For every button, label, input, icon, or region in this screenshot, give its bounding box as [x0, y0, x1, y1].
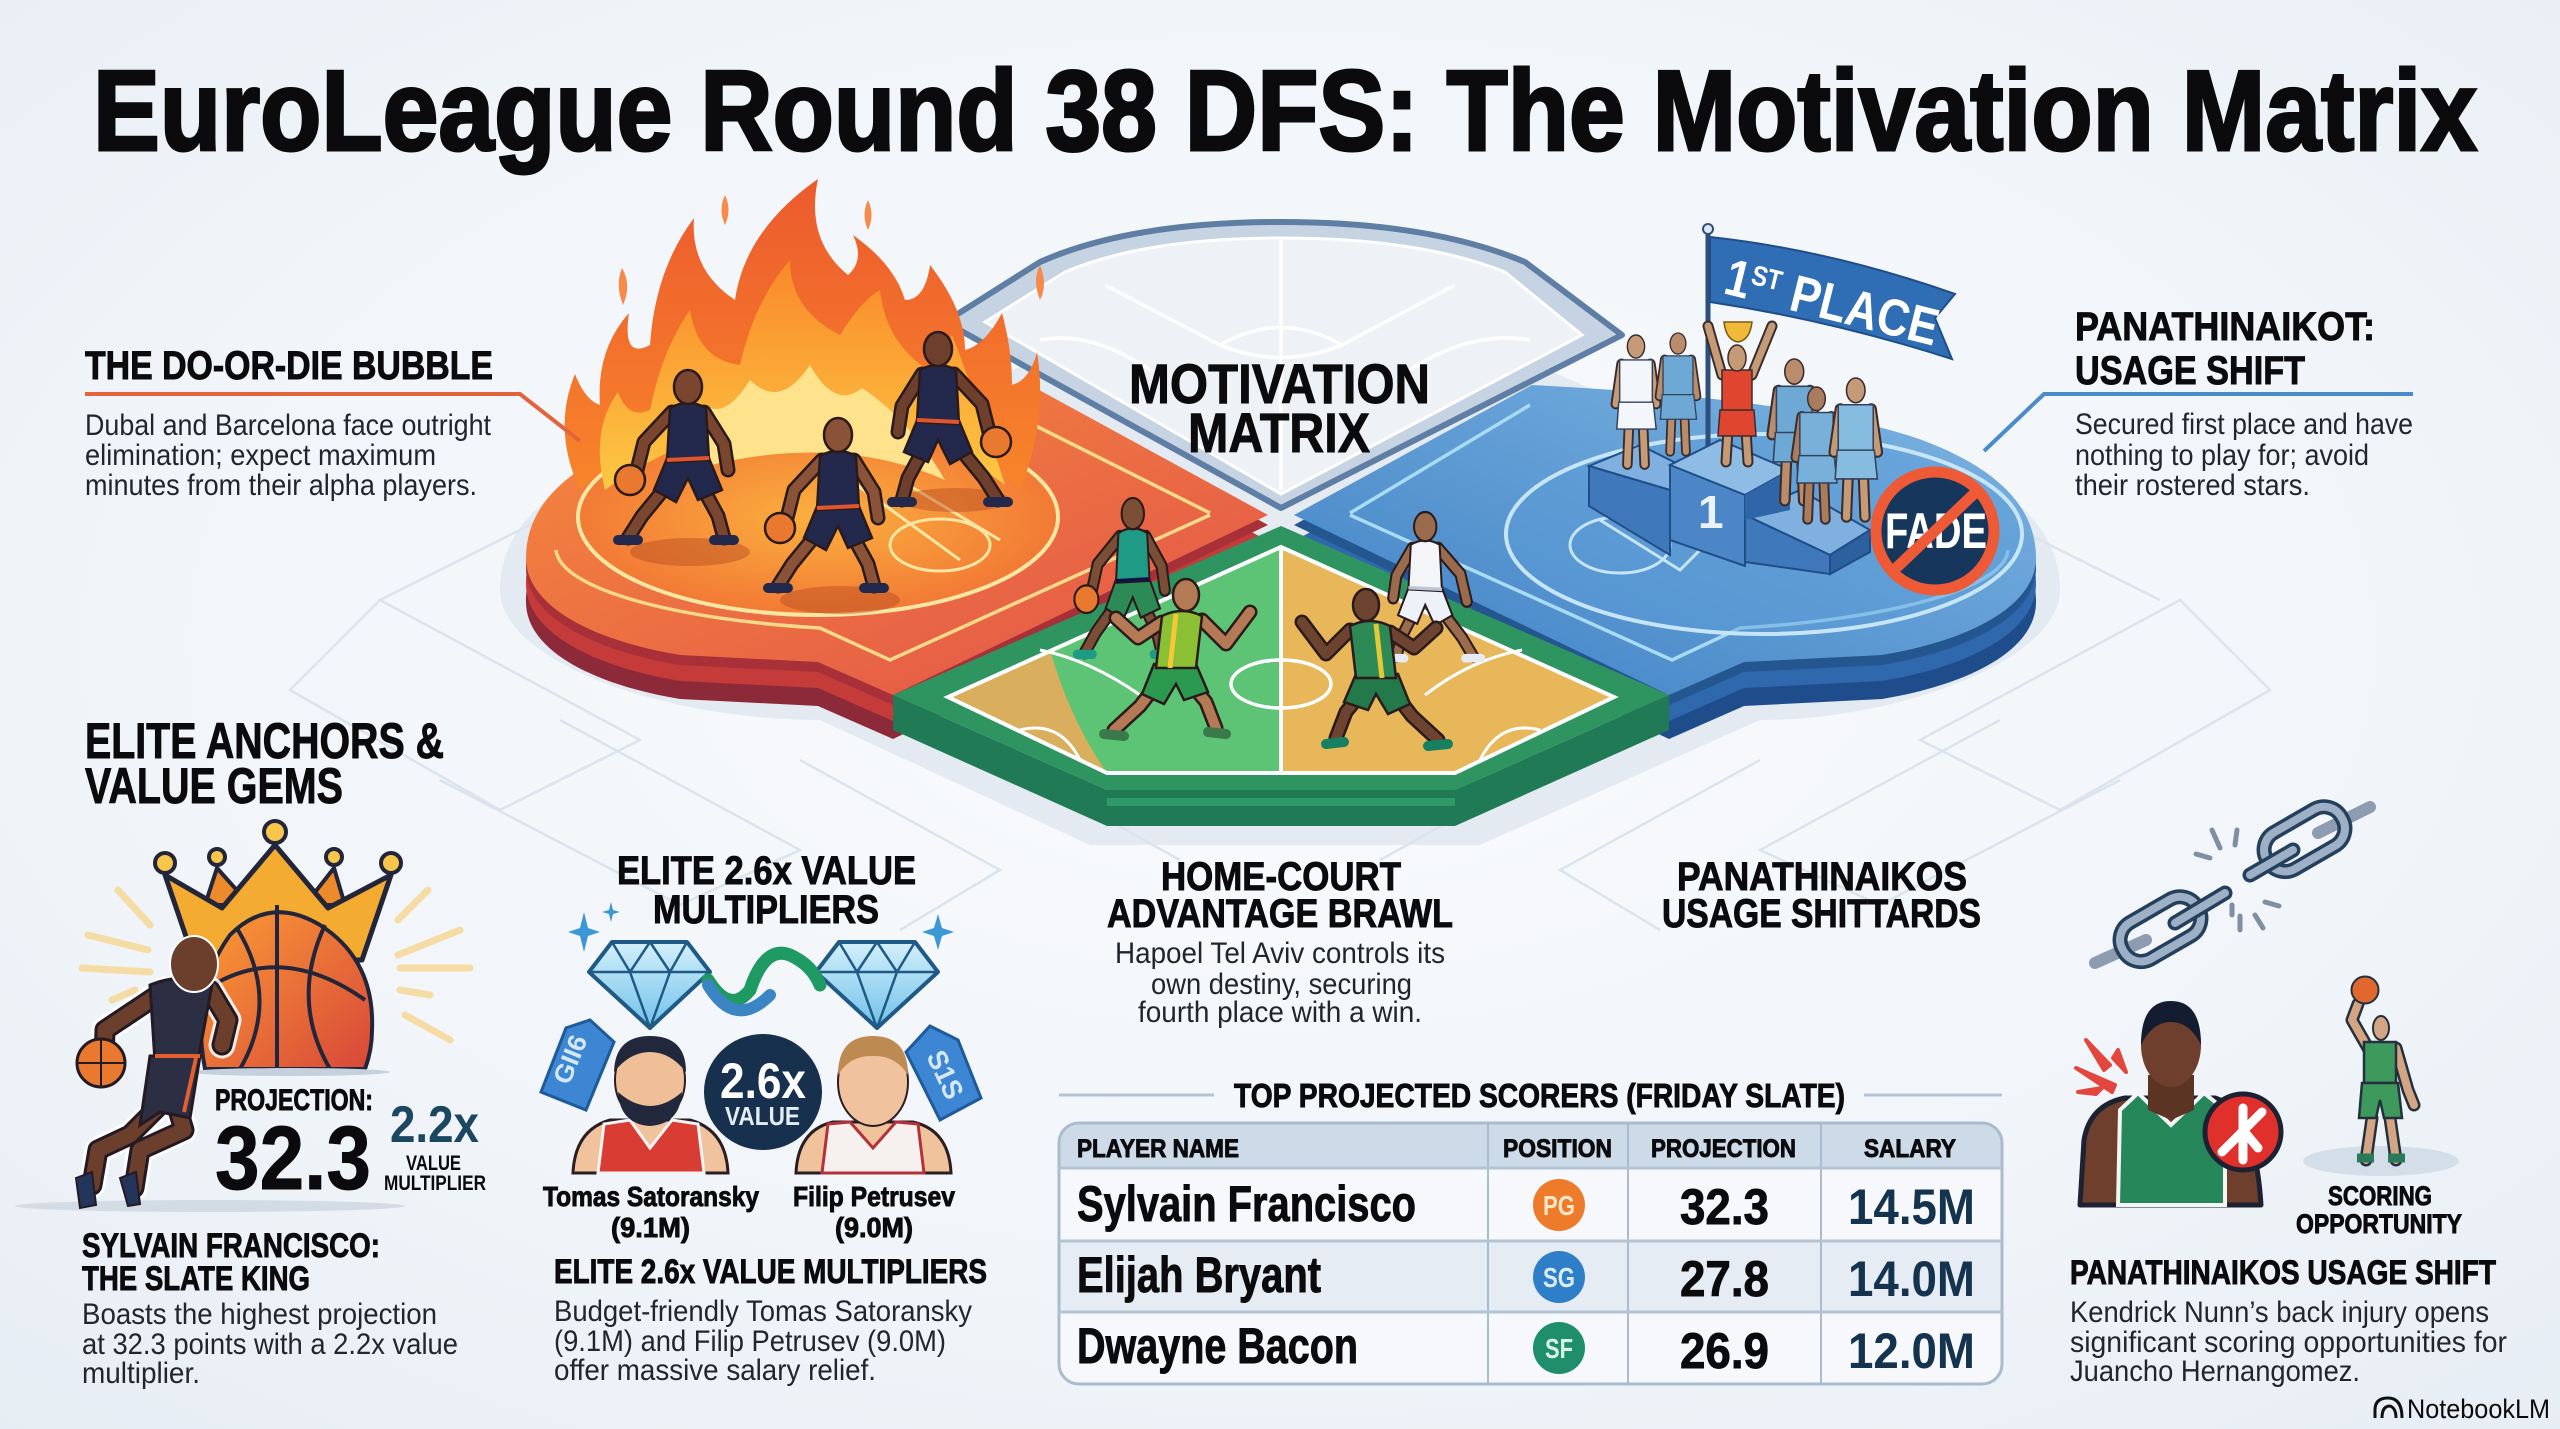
text block: value multipliers: ELITE 2.6x VALUE MULTIPLIERS — [554, 1253, 987, 1291]
player captions — [543, 1181, 955, 1243]
row: Elijah Bryant: SG — [1543, 1262, 1575, 1293]
table header — [1077, 1135, 1956, 1163]
row: Sylvain Francisco — [1077, 1176, 1975, 1235]
price tags: GII6 — [547, 1031, 593, 1088]
row: Dwayne Bacon: 12.0M — [1848, 1323, 1975, 1379]
players: green zone — [1074, 498, 1484, 746]
callout: usage shift fade: USAGE SHIFT — [2075, 349, 2305, 393]
text block: home-court advantage — [1107, 855, 1453, 1029]
section heading: elite anchors: VALUE GEMS — [85, 758, 343, 814]
matrix label: MOTIVATION — [1129, 352, 1430, 415]
price tags: S1S — [921, 1045, 970, 1104]
pain bolts — [2076, 1040, 2126, 1094]
flames over red quadrant — [565, 179, 1044, 490]
stat: value multiplier — [384, 1096, 486, 1195]
illustration: value gems and players — [541, 902, 981, 1173]
text block: panathinaikos usage shift: significant scoring opportunities for — [2070, 1326, 2507, 1359]
notebooklm mark: NotebookLM — [2407, 1394, 2550, 1424]
stat: value multiplier: 2.2x — [390, 1096, 479, 1154]
icon: shooter scoring opportunity: SCORING — [2328, 1181, 2432, 1211]
text block: home-court advantage: HOME-COURT — [1161, 855, 1401, 899]
podium with champions — [1589, 224, 1955, 574]
swap swirl — [708, 953, 820, 1000]
text block: value multipliers: (9.1M) and Filip Petrusev (9.0M) — [554, 1325, 946, 1358]
sparkles — [568, 902, 954, 952]
text block: slate king: Boasts the highest projection — [82, 1298, 437, 1331]
row: Sylvain Francisco: PG — [1543, 1190, 1575, 1221]
callout: usage shift fade — [1984, 305, 2413, 502]
quadrant: home court green — [893, 526, 1669, 826]
basketball — [201, 912, 372, 1069]
flag: 1st place: 1 — [1719, 248, 1761, 312]
stat: projection: PROJECTION: — [215, 1084, 373, 1117]
heading: elite multipliers: ELITE 2.6x VALUE — [617, 849, 916, 893]
table: top projected scorers — [1059, 1077, 2002, 1384]
row: Elijah Bryant — [1077, 1247, 1975, 1307]
badge: 2.6x value: VALUE — [725, 1101, 800, 1131]
price tags — [541, 1020, 981, 1120]
text block: slate king: THE SLATE KING — [82, 1260, 310, 1298]
sun rays — [82, 890, 470, 1040]
row: Dwayne Bacon — [1077, 1318, 1975, 1379]
callout: usage shift fade: nothing to play for; avoid — [2075, 439, 2369, 472]
text block: value multipliers: Budget-friendly Tomas Satoransky — [554, 1295, 972, 1328]
heading: usage shittards — [1662, 855, 1981, 936]
row: Elijah Bryant: 14.0M — [1848, 1251, 1975, 1307]
table header: POSITION — [1503, 1135, 1612, 1163]
row: Elijah Bryant: Elijah Bryant — [1077, 1247, 1321, 1303]
icon: shooter scoring opportunity — [2296, 976, 2462, 1239]
callout: do-or-die bubble: THE DO-OR-DIE BUBBLE — [85, 344, 493, 388]
callout: do-or-die bubble: minutes from their alpha players. — [85, 469, 477, 502]
stat: projection: 32.3 — [215, 1109, 371, 1209]
player captions: Tomas Satoransky — [543, 1181, 759, 1212]
text block: home-court advantage: Hapoel Tel Aviv controls its — [1115, 937, 1445, 970]
callout: do-or-die bubble: Dubal and Barcelona face outright — [85, 409, 492, 442]
text block: home-court advantage: ADVANTAGE BRAWL — [1107, 892, 1453, 936]
table header: SALARY — [1864, 1135, 1956, 1163]
table header: PLAYER NAME — [1077, 1135, 1239, 1163]
callout: usage shift fade: Secured first place and have — [2075, 408, 2413, 441]
matrix label: MATRIX — [1188, 401, 1370, 464]
icon: shooter scoring opportunity: OPPORTUNITY — [2296, 1209, 2462, 1239]
row: Sylvain Francisco: 32.3 — [1680, 1179, 1769, 1235]
heading: usage shittards: USAGE SHITTARDS — [1662, 892, 1981, 936]
fade badge: FADE — [1885, 503, 1987, 559]
row: Sylvain Francisco: Sylvain Francisco — [1077, 1176, 1416, 1232]
heading: elite multipliers — [617, 849, 916, 932]
row: Sylvain Francisco: 14.5M — [1848, 1179, 1975, 1235]
row: Dwayne Bacon: Dwayne Bacon — [1077, 1318, 1358, 1374]
quadrant: usage shift blue — [1294, 385, 2036, 739]
callout: do-or-die bubble: elimination; expect maximum — [85, 439, 436, 472]
text block: value multipliers — [554, 1253, 987, 1387]
callout: usage shift fade: PANATHINAIKOT: — [2075, 305, 2375, 349]
text block: home-court advantage: own destiny, securing — [1151, 968, 1412, 1001]
quadrant: central grey court — [945, 222, 1622, 508]
matrix label — [1129, 352, 1430, 464]
row: Dwayne Bacon: SF — [1545, 1333, 1573, 1364]
stat: value multiplier: MULTIPLIER — [384, 1172, 486, 1195]
stat: value multiplier: VALUE — [406, 1152, 461, 1175]
badge: 2.6x value: 2.6x — [720, 1053, 806, 1109]
motivation matrix court platform — [500, 222, 2060, 845]
section heading: elite anchors: ELITE ANCHORS & — [85, 713, 444, 769]
player captions: Filip Petrusev — [793, 1181, 955, 1212]
text block: panathinaikos usage shift: Kendrick Nunn’s back injury opens — [2070, 1296, 2489, 1329]
callout: do-or-die bubble — [85, 344, 580, 502]
flag: 1st place: PLACE — [1773, 262, 1945, 357]
crown — [205, 868, 345, 905]
row: Dwayne Bacon: 26.9 — [1680, 1323, 1769, 1379]
table header: PROJECTION — [1651, 1135, 1796, 1163]
player captions: (9.0M) — [835, 1212, 913, 1243]
quadrant: do-or-die bubble red — [526, 385, 1268, 739]
players: red zone — [615, 332, 1011, 614]
table title: TOP PROJECTED SCORERS (FRIDAY SLATE) — [1234, 1077, 1845, 1114]
fade badge — [1876, 472, 1994, 590]
text block: home-court advantage: fourth place with a win. — [1138, 996, 1422, 1029]
callout: usage shift fade: their rostered stars. — [2075, 469, 2310, 502]
champion with trophy — [1708, 322, 1772, 462]
section heading: elite anchors — [85, 713, 444, 814]
faint isometric floor grid — [290, 520, 2270, 930]
diamonds — [589, 942, 938, 1028]
podium with champions: 1 — [1698, 486, 1724, 538]
heading: elite multipliers: MULTIPLIERS — [653, 888, 879, 932]
text block: value multipliers: offer massive salary relief. — [554, 1354, 876, 1387]
text block: panathinaikos usage shift: Juancho Hernangomez. — [2070, 1355, 2360, 1388]
text block: slate king: at 32.3 points with a 2.2x value — [82, 1328, 458, 1361]
flag: 1st place — [1703, 224, 1955, 470]
illustration: slate king crown and ball — [15, 821, 470, 1212]
player captions: (9.1M) — [611, 1212, 690, 1243]
text block: slate king: multiplier. — [82, 1357, 200, 1390]
icon: injured player — [2076, 1001, 2281, 1205]
heading: usage shittards: PANATHINAIKOS — [1677, 855, 1967, 899]
text block: slate king: SYLVAIN FRANCISCO: — [82, 1227, 380, 1265]
icon: broken chain — [2095, 799, 2370, 969]
text block: panathinaikos usage shift — [2070, 1254, 2507, 1388]
badge: 2.6x value — [704, 1034, 822, 1150]
player bust: petrusev — [796, 1036, 951, 1173]
row: Elijah Bryant: 27.8 — [1680, 1251, 1769, 1307]
text block: slate king — [82, 1227, 458, 1390]
flag: 1st place: ST — [1748, 259, 1786, 297]
player bust: satoransky — [573, 1036, 728, 1173]
player dribbling — [76, 936, 228, 1208]
